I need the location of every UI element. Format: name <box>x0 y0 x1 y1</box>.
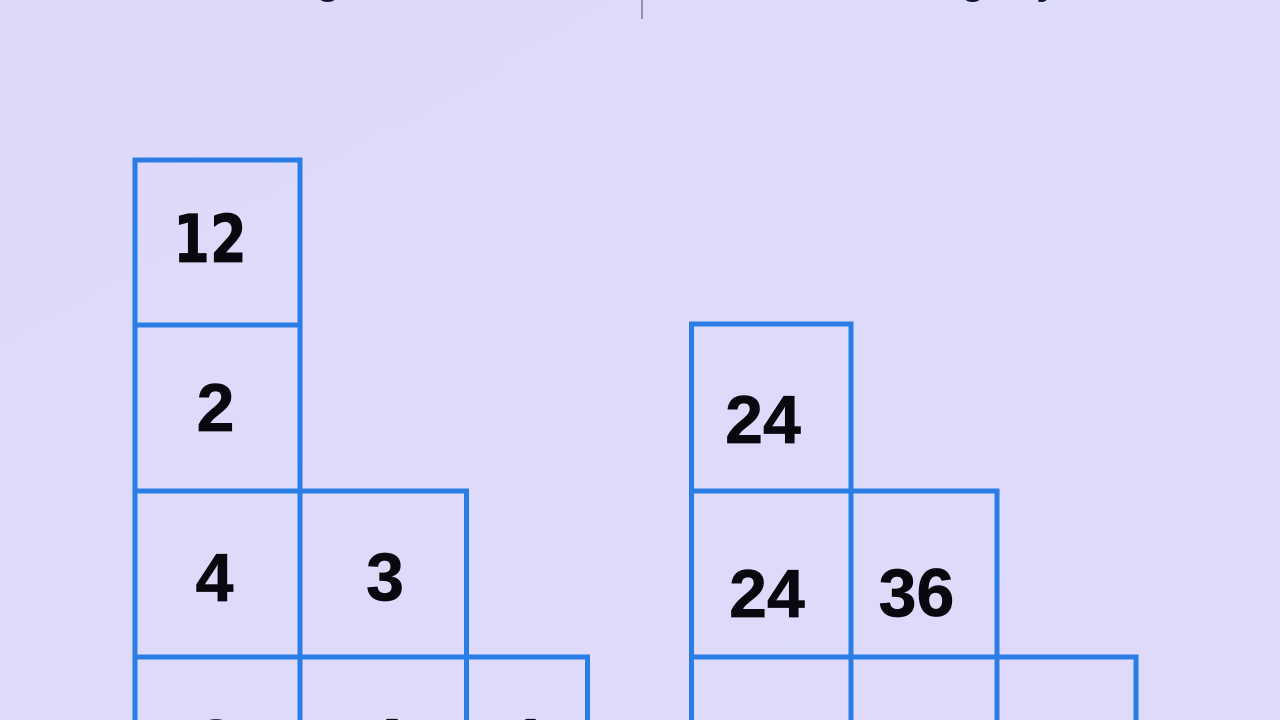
left grid lines <box>132 158 590 720</box>
panel: right number grid <box>689 322 1138 720</box>
right grid value: 24 middle: 24 <box>729 556 805 632</box>
left grid value: 3: 3 <box>366 539 404 615</box>
cropped heading: right column <box>961 0 1058 3</box>
centre divider <box>642 0 643 19</box>
left grid value: 2: 2 <box>197 370 234 446</box>
right grid lines <box>689 322 1138 720</box>
right grid value: 36: 36 <box>879 555 954 631</box>
right grid value: 24 top: 24 <box>725 382 801 458</box>
left grid value: 4: 4 <box>196 540 234 616</box>
left grid value: 12: 12 <box>173 202 247 279</box>
panel: left number grid <box>132 158 590 720</box>
